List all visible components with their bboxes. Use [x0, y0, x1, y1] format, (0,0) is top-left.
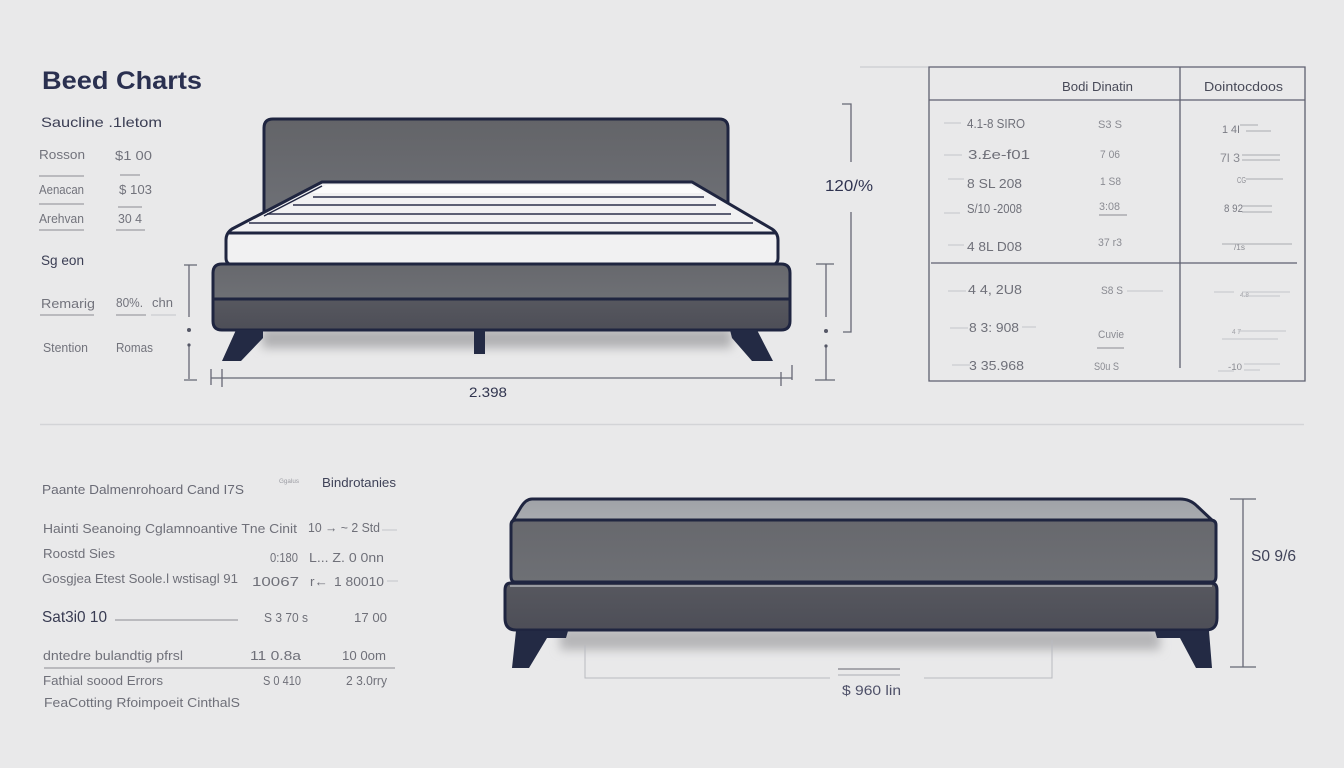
table column: values: 37 r3	[1098, 237, 1122, 249]
bed legs	[512, 631, 1212, 668]
table column: notes: 7l 3	[1220, 151, 1240, 165]
row: Rosson	[39, 147, 152, 176]
bed base	[213, 264, 790, 330]
table column: values	[1094, 119, 1163, 373]
row: Remarig: 80%.	[116, 295, 143, 310]
table column: values: S8 S	[1101, 285, 1123, 297]
dimension: side bed height: S0 9/6	[1251, 548, 1296, 565]
title: Beed Charts	[42, 67, 202, 95]
mattress top face	[512, 499, 1214, 522]
table column: sizes: 3.£e-f01	[968, 147, 1030, 162]
bed legs	[222, 330, 773, 361]
table column: sizes	[944, 116, 1036, 373]
floor shadow	[262, 328, 732, 348]
panel: dimensions table	[860, 67, 1305, 381]
spec row 6	[43, 673, 387, 688]
heading: upper list: Saucline .1letom	[41, 114, 162, 130]
row: Stention	[43, 340, 153, 355]
spec row 3: Gosgjea Etest Soole.l wstisagl 91	[42, 571, 238, 586]
table column: values: 1 S8	[1100, 176, 1121, 188]
spec row 3: r←	[310, 574, 328, 589]
dimension: side bed width	[585, 640, 1052, 698]
row: Remarig: Remarig	[41, 296, 95, 311]
table column: values: 3:08	[1099, 201, 1120, 213]
spec row 1	[43, 520, 397, 536]
base	[505, 583, 1217, 630]
spec row 2: Roostd Sies	[43, 546, 116, 561]
row: Remarig: chn	[152, 295, 173, 310]
row: Aenacan: Aenacan	[39, 182, 84, 197]
spec row 2: 0:180	[270, 550, 298, 565]
table column: notes: -10	[1228, 362, 1242, 372]
row: Arehvan: 30 4	[118, 211, 142, 226]
spec row 3: 10067	[252, 574, 299, 589]
table column: sizes: 4.1-8 SIRO	[967, 116, 1025, 131]
spec row 5: dntedre bulandtig pfrsl	[43, 648, 183, 663]
row: Remarig	[40, 295, 176, 315]
table column: values: S0u S	[1094, 361, 1119, 373]
row: Rosson: Rosson	[39, 147, 85, 162]
headboard	[264, 119, 728, 215]
table column: values: Cuvie	[1098, 329, 1124, 341]
row: Arehvan	[39, 211, 145, 230]
dimension: side bed width: $ 960 lin	[842, 682, 901, 698]
row: Aenacan: $ 103	[119, 182, 152, 197]
spec row 6: 2 3.0rry	[346, 673, 387, 688]
table column: notes	[1214, 124, 1292, 372]
dimension: bed width: 2.398	[469, 384, 507, 400]
spec row 1: 10 → ~ 2 Std	[308, 520, 380, 535]
spec row 4: Sat3i0 10	[42, 609, 107, 626]
dimension: total height: 120/%	[825, 178, 873, 195]
table column: sizes: 3 35.968	[969, 358, 1024, 373]
spec row 4: S 3 70 s	[264, 610, 308, 625]
dimension: total height	[825, 104, 873, 332]
table header	[1062, 79, 1284, 94]
table column: notes: 4 7	[1232, 329, 1241, 336]
spec row 6: S 0 410	[263, 673, 301, 688]
mattress body	[511, 520, 1216, 582]
row: Aenacan	[39, 182, 152, 207]
spec row 3	[42, 571, 398, 589]
table column: sizes: 8 SL 208	[967, 176, 1022, 191]
table column: notes: /1s	[1234, 243, 1245, 252]
table column: values: 7 06	[1100, 149, 1120, 161]
dimension: left height	[184, 265, 197, 380]
table column: values: S3 S	[1098, 119, 1122, 131]
floor shadow	[560, 628, 1160, 650]
table header: Dointocdoos	[1204, 79, 1284, 94]
mattress	[226, 182, 778, 265]
illustration: side view bed	[505, 499, 1217, 668]
spec row 2: L... Z. 0 0nn	[309, 550, 384, 565]
list heading	[42, 475, 396, 497]
row: Stention: Stention	[43, 340, 88, 355]
divider	[40, 424, 1304, 426]
table frame	[929, 67, 1305, 381]
heading: second list: Sg eon	[41, 252, 84, 268]
dimension: bed width	[211, 365, 792, 400]
panel: upper left size list	[39, 114, 176, 355]
spec row 6: Fathial soood Errors	[43, 673, 164, 688]
spec row 4	[42, 609, 387, 626]
spec row 1: Hainti Seanoing Cglamnoantive Tne Cinit	[43, 521, 297, 536]
table column: notes: 1 4I	[1222, 124, 1240, 136]
table column: notes: 4.8	[1240, 293, 1250, 299]
table column: sizes: 8 3: 908	[969, 320, 1019, 335]
row: Stention: Romas	[116, 340, 153, 355]
table column: sizes: S/10 -2008	[967, 201, 1022, 216]
spec row 5: 11 0.8a	[250, 648, 302, 663]
list heading: Bindrotanies	[322, 475, 396, 490]
spec row 7: FeaCotting Rfoimpoeit CinthalS	[44, 695, 240, 710]
illustration: front bed with headboard	[213, 119, 790, 361]
spec row 5	[43, 648, 386, 663]
table column: sizes: 4 8L D08	[967, 239, 1022, 254]
spec row 2	[43, 546, 384, 565]
table column: notes: 8 92	[1224, 203, 1243, 215]
dimension: side bed height	[1230, 499, 1296, 667]
list heading: Ggalus	[279, 479, 299, 485]
list heading: Paante Dalmenrohoard Cand I7S	[42, 482, 244, 497]
dimension: right height	[815, 264, 835, 380]
table column: notes: CG	[1237, 176, 1246, 185]
row: Rosson: $1 00	[115, 148, 152, 163]
spec row 4: 17 00	[354, 610, 387, 625]
table header: Bodi Dinatin	[1062, 79, 1133, 94]
spec row 3: 1 80010	[334, 574, 384, 589]
row: Arehvan: Arehvan	[39, 211, 84, 226]
table column: sizes: 4 4, 2U8	[968, 282, 1022, 297]
panel: lower left specification list	[42, 475, 398, 710]
spec row 5: 10 0om	[342, 648, 386, 663]
